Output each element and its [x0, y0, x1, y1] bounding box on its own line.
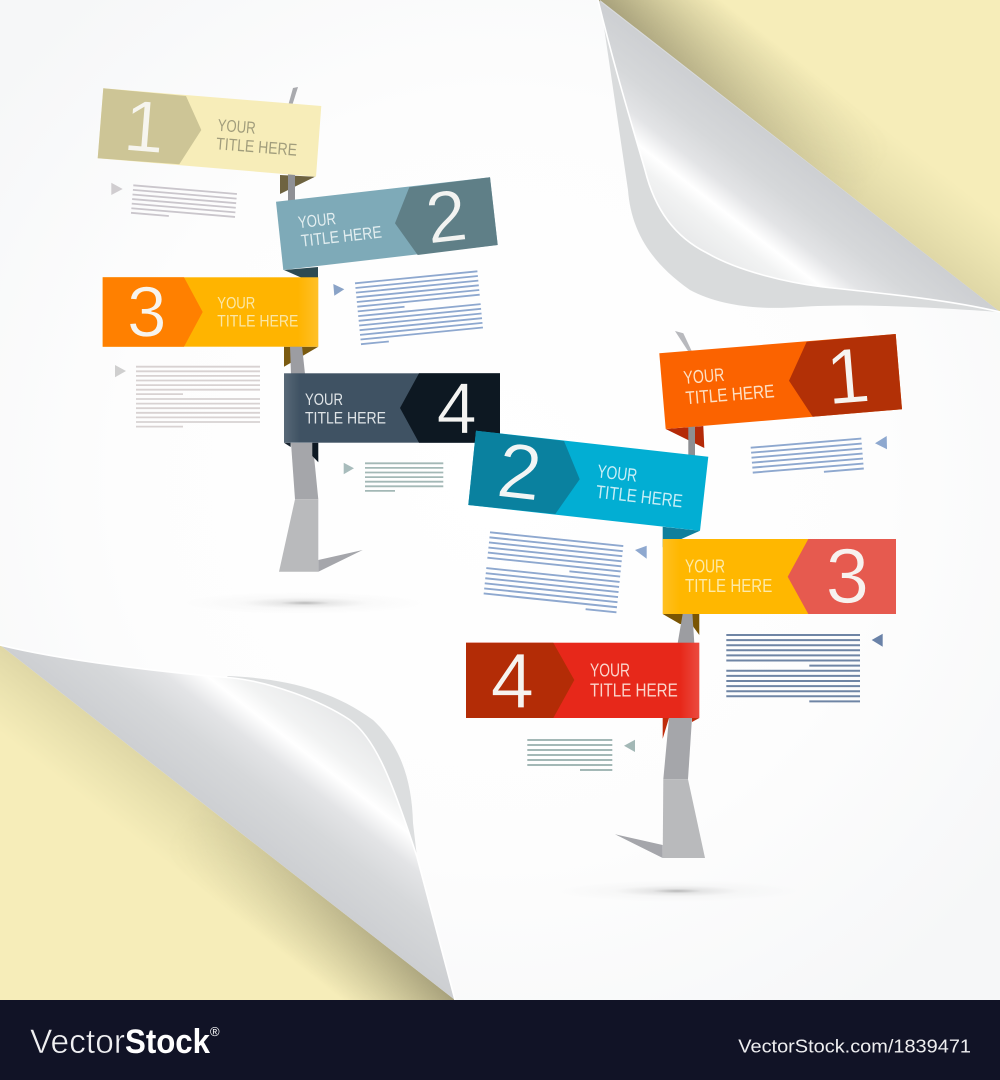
- left text block 3: [115, 365, 260, 427]
- footer logo: [30, 1023, 220, 1061]
- right sign 1: red-orange banner: 1: [823, 330, 873, 421]
- left sign 2: steel blue banner: YOUR: [297, 209, 337, 232]
- right sign 3: amber and coral banner: TITLE HERE: [685, 575, 772, 596]
- left sign 2: steel blue banner: 2: [421, 175, 471, 260]
- left text block 2: [333, 271, 483, 344]
- right signpost ground shadow: [552, 880, 802, 902]
- right sign 3: amber and coral banner: YOUR: [685, 555, 725, 576]
- right text block 2: [483, 532, 647, 612]
- left sign 2: steel blue banner: TITLE HERE: [300, 223, 383, 251]
- right sign 4: red banner: [466, 636, 699, 739]
- right sign 4: red banner: TITLE HERE: [590, 680, 678, 701]
- left sign 1: pale yellow banner: 1: [121, 85, 168, 169]
- left sign 1: pale yellow banner: YOUR: [217, 116, 256, 138]
- left text block 4: [344, 463, 443, 491]
- left sign 4: charcoal banner: TITLE HERE: [305, 408, 386, 427]
- right sign 2: cyan banner: YOUR: [596, 460, 638, 486]
- bottom left page curl: [0, 645, 455, 1000]
- right text block 1: [751, 436, 887, 478]
- right sign 2: cyan banner: TITLE HERE: [595, 481, 684, 511]
- left sign 1: pale yellow banner: [98, 85, 321, 204]
- right sign 4: red banner: YOUR: [590, 660, 630, 681]
- footer logo: Stock: [125, 1023, 210, 1061]
- right sign 3: amber and coral banner: 3: [826, 532, 869, 620]
- right sign 2: cyan banner: [468, 425, 708, 547]
- left text block 1: [111, 183, 237, 222]
- left signpost ground shadow: [180, 592, 430, 614]
- left sign 1: pale yellow banner: TITLE HERE: [215, 134, 298, 160]
- left sign 4: charcoal banner: 4: [437, 369, 477, 449]
- left sign 3: orange banner: [103, 274, 318, 374]
- footer logo: Vector: [30, 1023, 125, 1061]
- left sign 3: orange banner: TITLE HERE: [217, 312, 298, 331]
- left sign 3: orange banner: 3: [127, 274, 166, 352]
- right text block 4: [527, 740, 635, 770]
- right sign 1: red-orange banner: TITLE HERE: [685, 380, 775, 408]
- left signpost pole: [279, 87, 363, 572]
- left sign 4: charcoal banner: YOUR: [305, 390, 343, 409]
- right signpost pole: [615, 331, 705, 858]
- left sign 2: steel blue banner: [276, 175, 498, 285]
- right text block 3: [726, 634, 883, 701]
- top right page curl: [598, 0, 1000, 312]
- left sign 4: charcoal banner: [284, 369, 500, 462]
- footer image id: VectorStock.com/1839471: [738, 1037, 971, 1057]
- right sign 4: red banner: 4: [491, 636, 534, 724]
- right sign 1: red-orange banner: YOUR: [683, 364, 725, 388]
- right sign 1: red-orange banner: [659, 330, 902, 460]
- footer bar: [0, 1000, 1000, 1080]
- footer logo: ®: [210, 1024, 220, 1039]
- right sign 2: cyan banner: 2: [493, 425, 546, 518]
- right sign 3: amber and coral banner: [663, 532, 896, 643]
- left sign 3: orange banner: YOUR: [217, 293, 255, 312]
